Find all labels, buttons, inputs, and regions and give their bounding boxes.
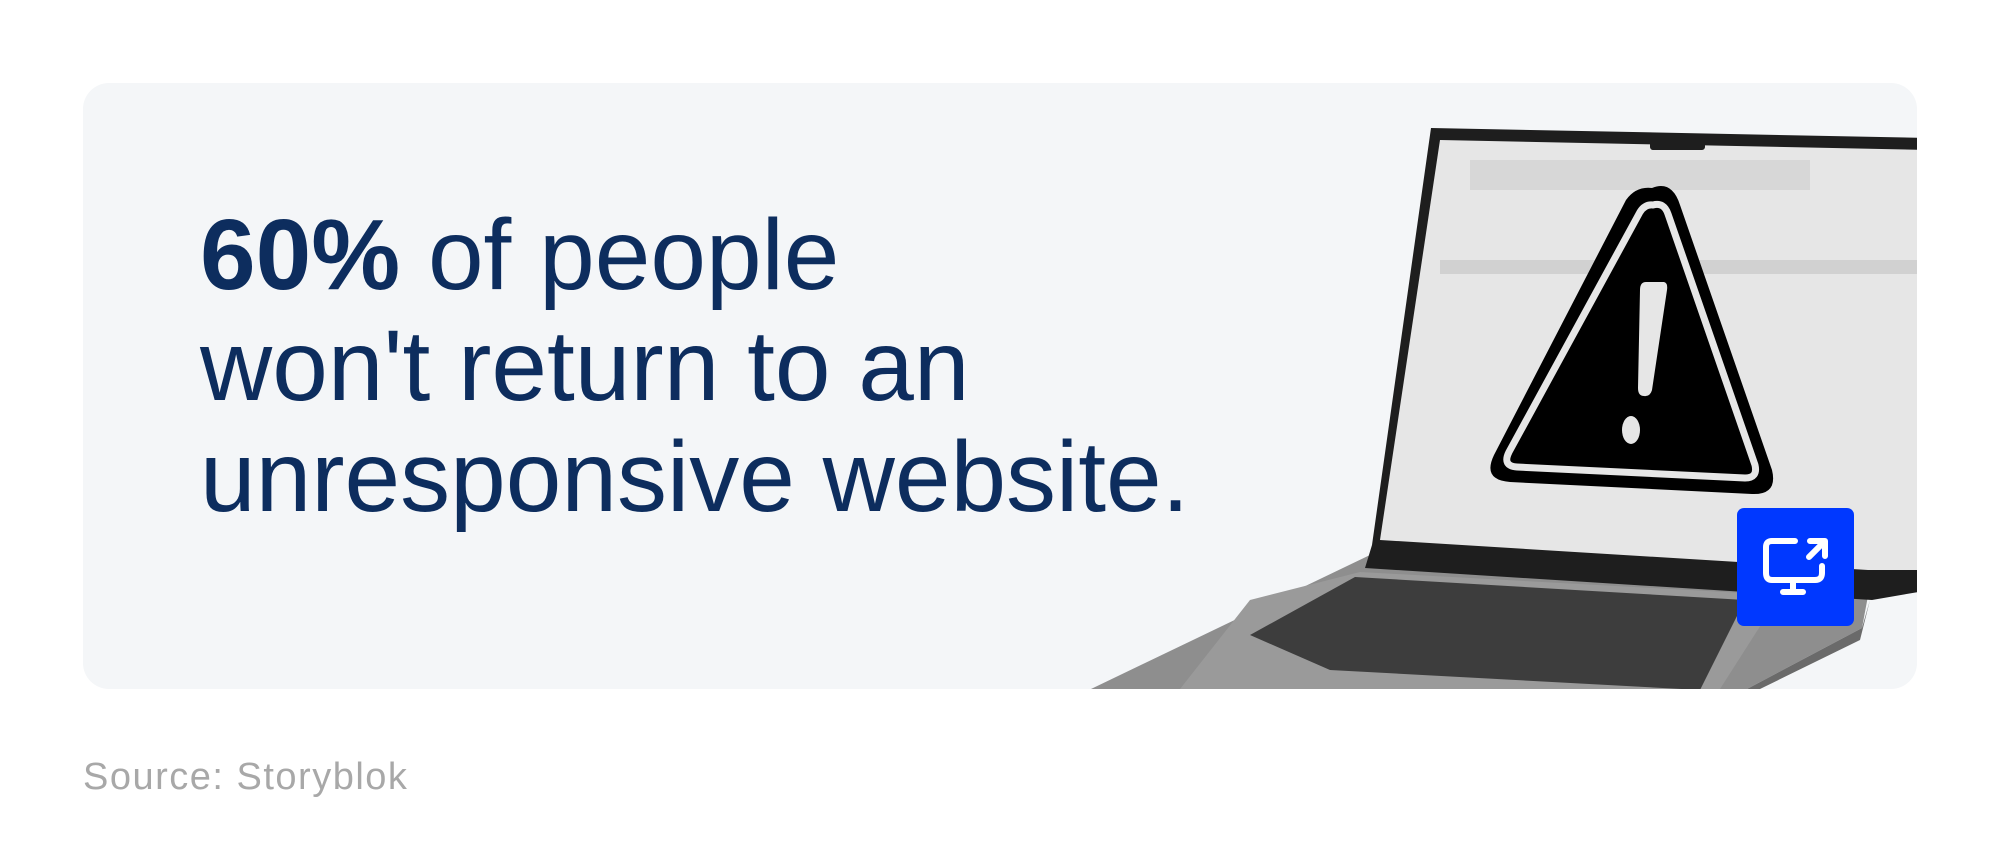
- icon: warning triangle: [1490, 186, 1773, 494]
- headline text: unresponsive website.: [200, 421, 1189, 533]
- source note: Source: Storyblok: [83, 756, 408, 798]
- laptop screen: [1365, 128, 1930, 600]
- keyboard: [1250, 577, 1745, 690]
- headline text: 60% of people: [200, 199, 839, 311]
- headline text: [200, 199, 1189, 533]
- panel: stat card: [83, 83, 1917, 689]
- illustration: laptop with warning: [1091, 128, 1917, 689]
- icon: blue monitor badge: [1737, 508, 1854, 626]
- headline text: won't return to an: [200, 310, 970, 422]
- laptop base: [1091, 555, 1870, 690]
